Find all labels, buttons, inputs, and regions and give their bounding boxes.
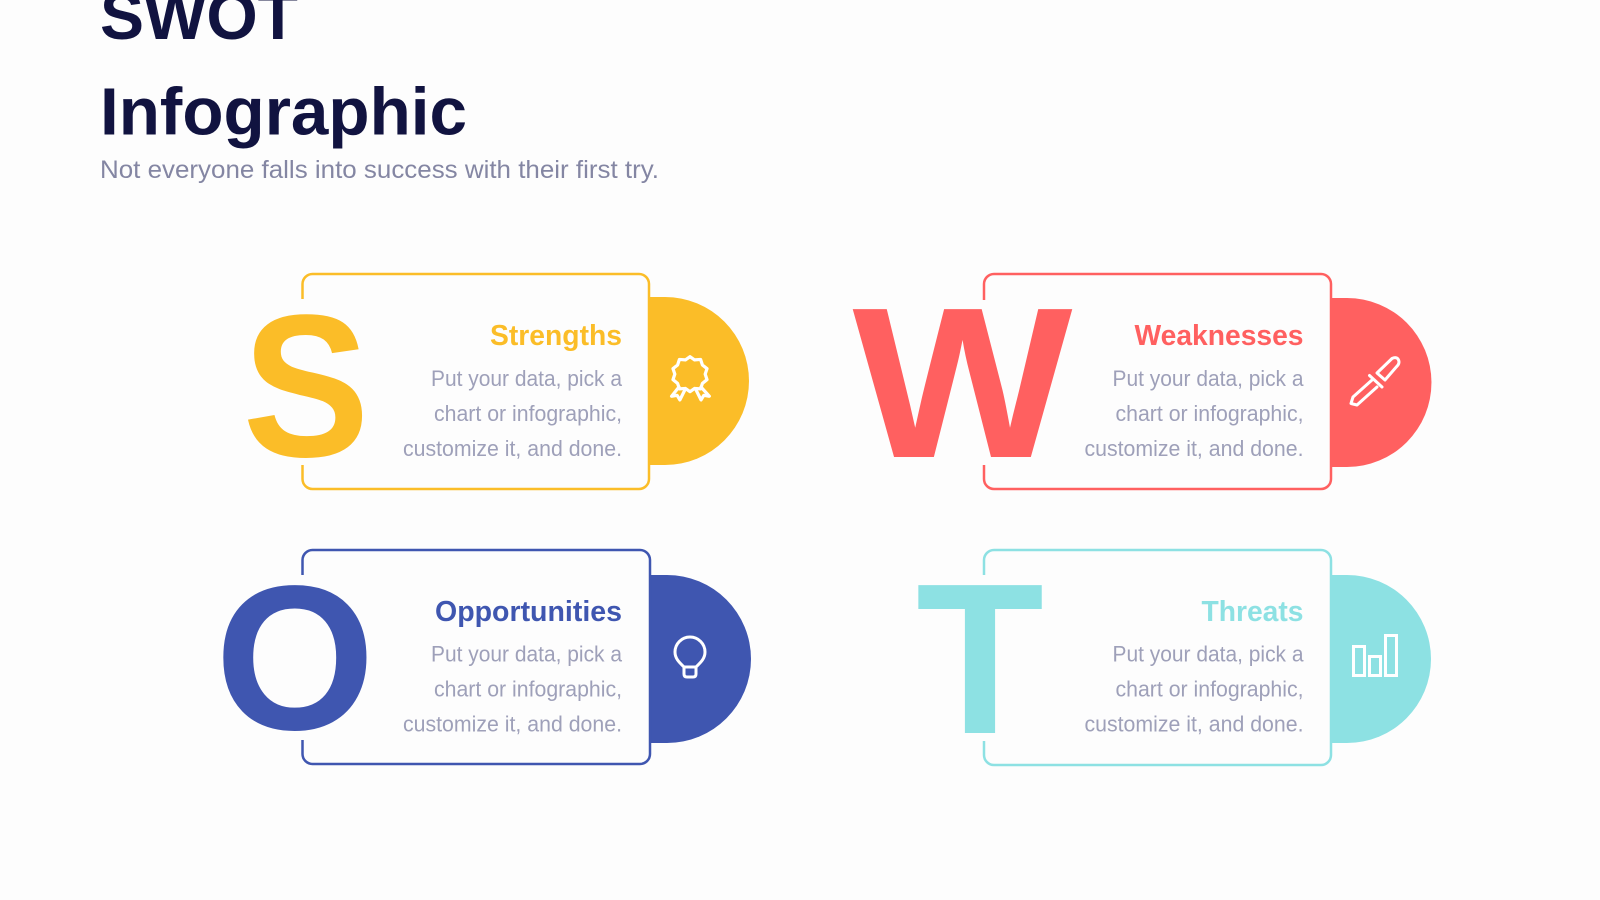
body: strengths: customize it, and done. xyxy=(403,436,622,461)
letter W: W xyxy=(852,262,1073,503)
heading: weaknesses: Weaknesses xyxy=(1134,320,1304,352)
letter T: T xyxy=(916,538,1044,779)
title xyxy=(100,0,467,150)
icon: pipette xyxy=(1351,358,1399,405)
body: weaknesses: customize it, and done. xyxy=(1084,436,1304,461)
semicircle: threats xyxy=(1331,575,1431,743)
letter O: O xyxy=(215,543,375,773)
icon: award ribbon xyxy=(672,357,709,400)
heading: threats: Threats xyxy=(1202,596,1304,628)
title: Infographic xyxy=(100,74,467,150)
card frame: weaknesses xyxy=(984,274,1331,489)
card frame: opportunities xyxy=(302,550,650,764)
body: weaknesses xyxy=(1084,366,1304,461)
icon: bar chart xyxy=(1354,636,1396,676)
body: weaknesses: Put your data, pick a xyxy=(1112,366,1304,391)
card frame: strengths xyxy=(302,274,649,489)
panel: threats xyxy=(916,538,1431,779)
subtitle: Not everyone falls into success with their first try. xyxy=(100,156,659,184)
heading: opportunities: Opportunities xyxy=(435,596,622,628)
body: weaknesses: chart or infographic, xyxy=(1116,401,1304,426)
icon: light bulb xyxy=(675,637,705,677)
body: threats: Put your data, pick a xyxy=(1112,642,1304,666)
heading: strengths: Strengths xyxy=(490,320,622,352)
body: strengths: chart or infographic, xyxy=(434,401,622,426)
body: threats: customize it, and done. xyxy=(1084,712,1304,736)
body: threats: chart or infographic, xyxy=(1116,676,1304,702)
body: strengths xyxy=(403,366,623,461)
body: opportunities: customize it, and done. xyxy=(403,712,622,736)
panel: strengths xyxy=(242,273,749,500)
panel: weaknesses xyxy=(852,262,1431,503)
body: threats xyxy=(1084,642,1304,736)
semicircle: strengths xyxy=(649,297,749,465)
body: opportunities xyxy=(403,642,623,736)
card frame: threats xyxy=(984,550,1331,765)
body: strengths: Put your data, pick a xyxy=(431,366,623,391)
body: opportunities: chart or infographic, xyxy=(434,676,622,702)
body: opportunities: Put your data, pick a xyxy=(431,642,623,666)
letter S: S xyxy=(242,273,370,500)
semicircle: opportunities xyxy=(650,575,751,743)
semicircle: weaknesses xyxy=(1331,298,1431,467)
panel: opportunities xyxy=(215,543,751,773)
